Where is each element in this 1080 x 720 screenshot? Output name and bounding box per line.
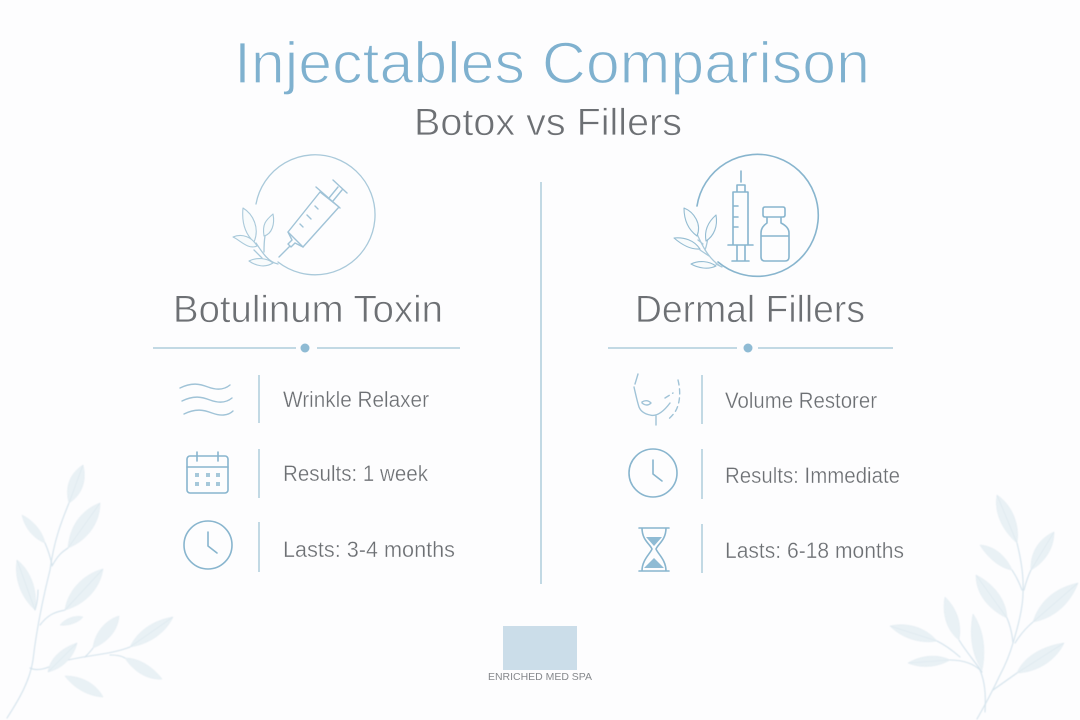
row: lasts 3-4 months: Lasts: 3-4 months <box>283 537 455 562</box>
row: wrinkle relaxer <box>180 375 429 423</box>
subtitle: Botox vs Fillers <box>414 102 682 144</box>
heading rule with dot <box>153 344 460 352</box>
panel: botulinum toxin <box>153 155 460 572</box>
logo: enriched med spa <box>488 626 592 683</box>
icon: waves <box>180 384 233 415</box>
title: Injectables Comparison <box>234 31 870 96</box>
decorative sprig: bottom left <box>7 465 173 718</box>
icon: calendar <box>187 452 228 493</box>
row: results 1 week: Results: 1 week <box>283 461 429 486</box>
row: lasts 3-4 months <box>184 521 455 572</box>
decorative sprig: bottom right <box>890 495 1078 719</box>
icon: clock <box>184 521 232 569</box>
heading: botulinum toxin: Botulinum Toxin <box>173 289 443 331</box>
icon: hourglass <box>639 528 669 571</box>
row: results immediate <box>629 449 900 499</box>
icon: clock <box>629 449 677 497</box>
heading rule with dot <box>608 344 893 352</box>
row: lasts 6-18 months: Lasts: 6-18 months <box>725 538 904 563</box>
row: results 1 week <box>187 449 429 498</box>
row: lasts 6-18 months <box>639 524 904 573</box>
center divider <box>540 182 542 584</box>
row: volume restorer <box>634 374 877 425</box>
row: wrinkle relaxer: Wrinkle Relaxer <box>283 387 429 412</box>
heading: dermal fillers: Dermal Fillers <box>635 289 865 331</box>
panel: dermal fillers <box>608 154 904 573</box>
row: volume restorer: Volume Restorer <box>725 388 877 413</box>
icon: syringe in circle with leaves <box>233 155 375 275</box>
logo: enriched med spa: ENRICHED MED SPA <box>488 671 592 683</box>
icon: face with dashed contour <box>634 374 680 425</box>
row: results immediate: Results: Immediate <box>725 463 900 488</box>
icon: syringe and vial in circle with leaves <box>674 154 818 276</box>
